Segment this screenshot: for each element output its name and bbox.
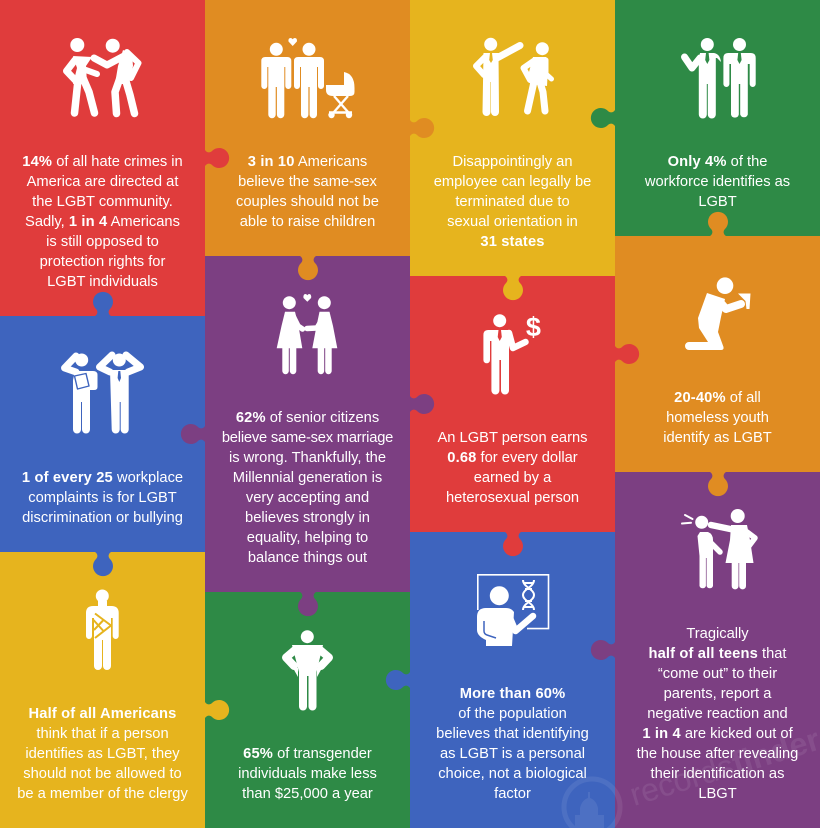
icon: two people fighting bbox=[66, 38, 138, 114]
tab: orange into yellow bbox=[410, 118, 434, 138]
text: 1 of every 25: 1 of every 25 workplace bbox=[22, 470, 183, 486]
icon: person with hands on hips bbox=[286, 630, 329, 710]
text: 14% of all hate crimes: America are directed at bbox=[27, 174, 178, 190]
text: 14% of all hate crimes: LGBT individuals bbox=[47, 274, 158, 290]
text: more than 60%: choice, not a biological bbox=[438, 766, 587, 782]
panel: workforce share (green) bbox=[591, 0, 820, 236]
text: half of all teens: half of all teens that bbox=[648, 646, 787, 662]
text: 65% of transgender: 65% of transgender bbox=[243, 746, 372, 762]
icon: two fathers with pram and heart bbox=[261, 38, 354, 118]
tab: purple into blue bbox=[591, 640, 615, 660]
text: 3 in 10 americans: couples should not be bbox=[236, 194, 379, 210]
panel: same-sex parents (orange) bbox=[205, 0, 434, 280]
text: more than 60%: More than 60% bbox=[460, 686, 565, 702]
tab: green into yellow bbox=[591, 108, 615, 128]
text: earnings: 0.68 for every dollar bbox=[447, 450, 578, 466]
tab: purple into green bbox=[298, 592, 318, 616]
panel: hate crimes (red) bbox=[0, 0, 229, 316]
panel: termination (yellow) bbox=[410, 0, 615, 276]
panel: teens coming out (purple) bbox=[591, 472, 820, 828]
icon: mother hitting child bbox=[682, 509, 755, 589]
text: 62% of senior citizens: believe same-sex marriage bbox=[222, 430, 393, 446]
tab: orange up into green bbox=[708, 212, 728, 236]
text: half of all americans: be a member of the clergy bbox=[17, 786, 188, 802]
text: disappointingly an employee: employee can legally be bbox=[434, 174, 591, 190]
tab: orange into purple bbox=[298, 256, 318, 280]
tab: yellow into green bbox=[205, 700, 229, 720]
watermark: recordsfinder logo bbox=[564, 721, 820, 828]
text: 20-40% homeless youth: homeless youth bbox=[666, 410, 769, 426]
icon: couple holding hands with heart bbox=[277, 294, 337, 374]
text: 65% of transgender: individuals make less bbox=[238, 766, 377, 782]
text: 62% of senior citizens: believes strongly in bbox=[245, 510, 370, 526]
panel: transgender income (green) bbox=[205, 592, 410, 828]
text: only 4%: workforce identifies as bbox=[644, 174, 790, 190]
text: half of all americans: identifies as LGBT, they bbox=[25, 746, 180, 762]
text: disappointingly an employee: terminated due to bbox=[455, 194, 570, 210]
text: more than 60%: of the population bbox=[458, 706, 567, 722]
text: earnings: An LGBT person earns bbox=[438, 430, 587, 446]
icon: kneeling person begging bbox=[685, 277, 750, 350]
tab: red into orange bbox=[615, 344, 639, 364]
text: half of all teens: 1 in 4 are kicked out of bbox=[642, 726, 793, 742]
icon: presenter with DNA board bbox=[477, 575, 548, 646]
icon: person with tag bbox=[86, 590, 119, 670]
text: 14% of all hate crimes: Sadly, 1 in 4 Americans bbox=[25, 214, 180, 230]
tab: purple into blue bbox=[181, 424, 205, 444]
icon: two suited men bbox=[684, 38, 756, 118]
panel: personal choice (blue) bbox=[386, 532, 615, 828]
text: disappointingly an employee: Disappointingly an bbox=[452, 154, 573, 170]
panel: homeless youth (orange) bbox=[615, 212, 820, 496]
text: only 4%: Only 4% of the bbox=[668, 154, 767, 170]
tab: orange down into purple bbox=[708, 472, 728, 496]
text: 14% of all hate crimes: 14% of all hate crimes in bbox=[22, 154, 183, 170]
text: 62% of senior citizens: 62% of senior citizens bbox=[236, 410, 379, 426]
panel: workplace complaints (blue) bbox=[0, 292, 205, 576]
text: half of all americans: Half of all Americans bbox=[29, 706, 176, 722]
text: more than 60%: factor bbox=[494, 786, 531, 802]
text: 62% of senior citizens: Millennial generation is bbox=[233, 470, 382, 486]
text: more than 60%: believes that identifying bbox=[436, 726, 589, 742]
tab: red into orange bbox=[205, 148, 229, 168]
text: earnings: heterosexual person bbox=[446, 490, 579, 506]
text: 20-40% homeless youth: 20-40% of all bbox=[674, 390, 761, 406]
text: 3 in 10 americans: able to raise children bbox=[240, 214, 375, 230]
icon: boss pointing at employee leaving bbox=[476, 38, 552, 116]
text: 62% of senior citizens: is wrong. Thankfully, the bbox=[229, 450, 386, 466]
text: half of all teens: negative reaction and bbox=[647, 706, 788, 722]
text: half of all teens: their identification as bbox=[651, 766, 784, 782]
text: 1 of every 25: complaints is for LGBT bbox=[28, 490, 177, 506]
icon label: dollar sign: $ bbox=[526, 312, 541, 342]
text: disappointingly an employee: sexual orientation in bbox=[447, 214, 578, 230]
tab: blue into green bbox=[386, 670, 410, 690]
text: half of all teens: Tragically bbox=[686, 626, 749, 642]
text: 65% of transgender: than $25,000 a year bbox=[242, 786, 373, 802]
text: 1 of every 25: discrimination or bullying bbox=[22, 510, 183, 526]
text: 20-40% homeless youth: identify as LGBT bbox=[663, 430, 772, 446]
text: 14% of all hate crimes: the LGBT community. bbox=[32, 194, 173, 210]
text: earnings: earned by a bbox=[474, 470, 552, 486]
tab: purple into red bbox=[410, 394, 434, 414]
panel: senior citizens (purple) bbox=[205, 256, 434, 616]
text: half of all americans: should not be allowed to bbox=[23, 766, 182, 782]
text: disappointingly an employee: 31 states bbox=[480, 234, 545, 250]
tab: blue into red bbox=[93, 292, 113, 316]
text: half of all teens: the house after revealing bbox=[637, 746, 798, 762]
text: only 4%: LGBT bbox=[698, 194, 737, 210]
tab: yellow into red bbox=[503, 276, 523, 300]
text: half of all teens: “come out” to their bbox=[658, 666, 777, 682]
text: 14% of all hate crimes: is still opposed to bbox=[46, 234, 159, 250]
panel: earnings gap (red) bbox=[410, 276, 639, 556]
icon: two stressed workers holding heads bbox=[64, 354, 140, 434]
text: 3 in 10 americans: believe the same-sex bbox=[238, 174, 378, 190]
watermark: recordsfinder logo: recordsfinder bbox=[626, 721, 820, 813]
text: half of all americans: think that if a person bbox=[36, 726, 169, 742]
text: 62% of senior citizens: balance things out bbox=[248, 550, 367, 566]
icon: man with dollar sign bbox=[483, 314, 526, 394]
text: 62% of senior citizens: very accepting and bbox=[246, 490, 369, 506]
text: 14% of all hate crimes: protection rights for bbox=[40, 254, 165, 270]
tab: red into blue bbox=[503, 532, 523, 556]
text: 62% of senior citizens: equality, helping to bbox=[247, 530, 368, 546]
text: more than 60%: as LGBT is a personal bbox=[440, 746, 585, 762]
text: half of all teens: LBGT bbox=[698, 786, 737, 802]
text: half of all teens: parents, report a bbox=[664, 686, 772, 702]
text: 3 in 10 americans: 3 in 10 Americans bbox=[248, 154, 367, 170]
tab: blue into yellow bbox=[93, 552, 113, 576]
panel: clergy (yellow) bbox=[0, 552, 229, 828]
